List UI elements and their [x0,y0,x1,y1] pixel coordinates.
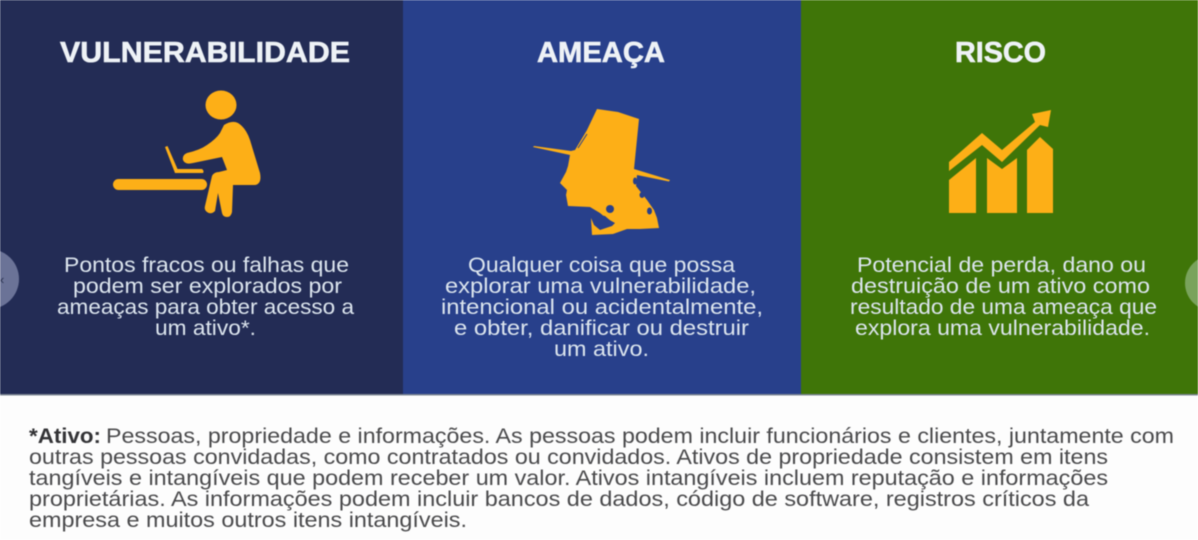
footnote text: tangíveis e intangíveis que podem receber um valor. Ativos intangíveis incluem reputação e informações [29,467,1108,490]
description: ameaça: um ativo. [554,338,649,361]
description: risco: explora uma vulnerabilidade. [855,317,1150,340]
description: ameaça: Qualquer coisa que possa [468,254,735,277]
panel: risco [801,0,1198,394]
description: ameaça: explorar uma vulnerabilidade, [445,275,756,298]
description: vulnerabilidade: um ativo*. [155,317,256,340]
icon: hat silhouette [533,109,670,235]
footnote text: outras pessoas convidadas, como contratados ou convidados. Ativos de propriedade consistem em itens [29,446,1108,469]
footnote label: *Ativo: [29,425,101,448]
icon: person at laptop [113,90,260,217]
icon: rising chart [949,110,1053,213]
carousel arrow: left [0,249,19,309]
description: risco: resultado de uma ameaça que [850,296,1157,319]
description: vulnerabilidade: podem ser explorados por [73,275,342,298]
carousel arrow: left: ‹ [0,272,4,287]
description: risco: destruição de um ativo como [851,275,1150,298]
footnote text: Pessoas, propriedade e informações. As pessoas podem incluir funcionários e clientes, juntamente com [106,425,1174,448]
panel: ameaça [403,0,801,394]
carousel arrow: right [1185,255,1198,311]
footnote text: proprietárias. As informações podem incluir bancos de dados, código de software, registros críticos da [29,488,1089,511]
description: vulnerabilidade: Pontos fracos ou falhas que [64,254,349,277]
description: risco [850,254,1157,340]
description: ameaça: intencional ou acidentalmente, [441,296,763,319]
heading: ameaça: AMEAÇA [537,37,665,69]
description: vulnerabilidade: ameaças para obter acesso a [57,296,354,319]
description: vulnerabilidade [57,254,354,340]
panel: vulnerabilidade [0,0,403,394]
description: ameaça: e obter, danificar ou destruir [454,317,749,340]
footnote: ativo [0,394,1198,532]
footnote text [29,425,1174,532]
footnote text: empresa e muitos outros itens intangíveis. [29,509,467,532]
description: ameaça [441,254,763,361]
heading: risco: RISCO [955,37,1046,69]
description: risco: Potencial de perda, dano ou [857,254,1146,277]
heading: vulnerabilidade: VULNERABILIDADE [60,37,350,69]
